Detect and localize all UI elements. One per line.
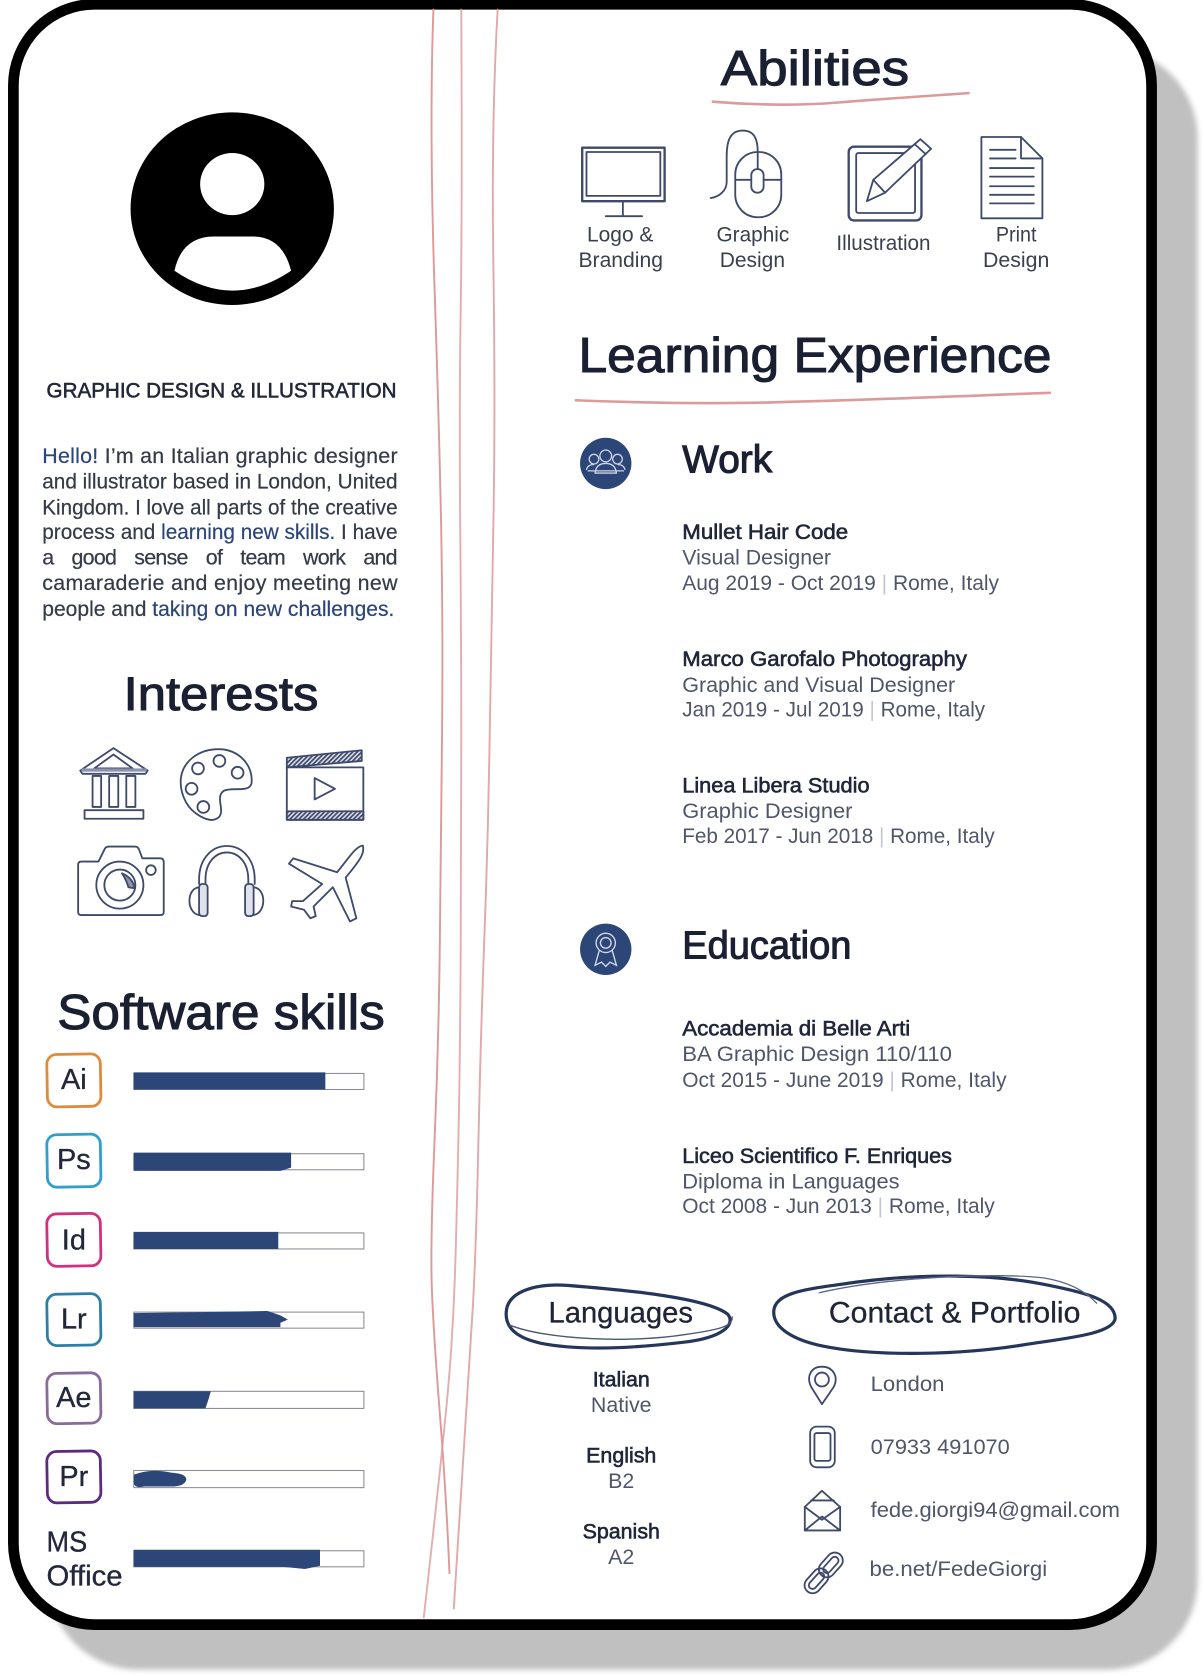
contact: portfolio link xyxy=(801,1549,1047,1597)
subtitle: GRAPHIC DESIGN & ILLUSTRATION xyxy=(47,379,397,403)
languages list: A2 xyxy=(608,1545,634,1569)
work: Linea Libera Studio: Linea Libera Studio xyxy=(682,774,870,798)
education: Accademia di Belle Arti: Oct 2015 - June 2019 | Rome, Italy xyxy=(682,1068,1007,1092)
heading: Learning Experience: Learning Experience xyxy=(578,328,1051,383)
languages list: B2 xyxy=(608,1469,634,1493)
icon: palette xyxy=(181,749,252,820)
contact: portfolio link: be.net/FedeGiorgi xyxy=(870,1557,1047,1581)
heading: Abilities xyxy=(713,41,969,105)
ability: Illustration: Illustration xyxy=(836,231,931,255)
contact: email: fede.giorgi94@gmail.com xyxy=(871,1498,1120,1522)
heading: Languages xyxy=(506,1285,732,1348)
icon: museum xyxy=(80,748,148,819)
skill: Lightroom: Lr xyxy=(61,1304,87,1336)
section: Work xyxy=(580,438,773,489)
icon: headphones xyxy=(189,846,263,916)
icon: profile avatar xyxy=(131,112,334,305)
work: Mullet Hair Code: Visual Designer xyxy=(682,546,831,570)
intro paragraph: Hello! I’m an Italian graphic designer xyxy=(42,444,398,468)
contact: location xyxy=(809,1367,944,1404)
icon: film clip xyxy=(287,750,363,820)
education: Accademia di Belle Arti xyxy=(682,1016,1007,1092)
languages list: Italian xyxy=(593,1367,650,1391)
ability: Graphic Design: Graphic xyxy=(717,222,790,246)
heading: Interests: Interests xyxy=(124,667,318,720)
icon: team badge xyxy=(580,438,631,489)
ability: Logo & Branding: Logo & xyxy=(587,222,653,246)
education: Accademia di Belle Arti: BA Graphic Design 110/110 xyxy=(682,1042,952,1066)
work: Mullet Hair Code xyxy=(682,520,999,595)
education: Liceo Scientifico F. Enriques: Oct 2008 - Jun 2013 | Rome, Italy xyxy=(682,1194,995,1218)
heading: Contact & Portfolio xyxy=(774,1276,1115,1353)
intro paragraph: process and learning new skills. I have xyxy=(42,520,398,544)
intro paragraph: a good sense of team work and xyxy=(42,546,398,570)
section: Education: Education xyxy=(682,924,851,967)
skill: Lightroom xyxy=(47,1293,364,1346)
languages list: Spanish xyxy=(583,1519,660,1543)
section: Work: Work xyxy=(682,439,773,482)
skill: Premiere xyxy=(47,1451,364,1503)
work: Marco Garofalo Photography: Jan 2019 - Jul 2019 | Rome, Italy xyxy=(682,698,985,722)
intro paragraph: camaraderie and enjoy meeting new xyxy=(42,571,398,595)
column dividers xyxy=(424,10,498,1617)
icon: smartphone xyxy=(810,1427,835,1467)
icon: map pin xyxy=(809,1367,836,1404)
skill: MS Office: MS xyxy=(47,1526,87,1558)
icon: camera xyxy=(78,847,164,915)
skill: After Effects xyxy=(47,1373,364,1424)
intro paragraph xyxy=(42,444,398,621)
icon: award badge xyxy=(580,924,631,975)
heading: Abilities: Abilities xyxy=(721,41,909,96)
ability: Print Design: Design xyxy=(983,248,1049,272)
icon: chain link xyxy=(801,1549,846,1597)
education: Liceo Scientifico F. Enriques xyxy=(682,1144,995,1218)
section: Education xyxy=(580,924,851,975)
ability: Print Design: Print xyxy=(996,222,1037,246)
education: Liceo Scientifico F. Enriques: Diploma in Languages xyxy=(682,1169,900,1193)
icon: document xyxy=(981,137,1042,218)
contact: location: London xyxy=(871,1372,944,1396)
skill: MS Office: Office xyxy=(47,1561,123,1593)
languages list xyxy=(583,1367,660,1569)
heading: Languages: Languages xyxy=(548,1296,693,1329)
languages list: English xyxy=(586,1443,656,1467)
intro paragraph: Kingdom. I love all parts of the creative xyxy=(42,495,398,519)
heading: Contact & Portfolio: Contact & Portfolio xyxy=(829,1296,1080,1329)
skill: MS Office xyxy=(47,1526,364,1593)
languages list: Native xyxy=(591,1393,652,1417)
interest icons xyxy=(78,748,363,921)
ability: Print Design xyxy=(981,137,1049,272)
skill: InDesign xyxy=(47,1213,364,1267)
work: Linea Libera Studio: Feb 2017 - Jun 2018 | Rome, Italy xyxy=(682,824,995,848)
work: Mullet Hair Code: Aug 2019 - Oct 2019 | Rome, Italy xyxy=(682,571,999,595)
intro paragraph: people and taking on new challenges. xyxy=(42,597,394,621)
work: Marco Garofalo Photography xyxy=(682,647,985,722)
work: Linea Libera Studio: Graphic Designer xyxy=(682,799,852,823)
ability: Graphic Design xyxy=(711,131,790,272)
contact: phone xyxy=(810,1427,1010,1467)
skill: Photoshop xyxy=(47,1134,364,1187)
skill: Premiere: Pr xyxy=(59,1461,89,1493)
heading: Learning Experience xyxy=(576,328,1051,403)
work: Marco Garofalo Photography: Graphic and Visual Designer xyxy=(682,673,955,697)
skill: InDesign: Id xyxy=(62,1225,86,1257)
ability: Illustration xyxy=(836,139,931,255)
skill: Illustrator: Ai xyxy=(61,1064,87,1096)
contact: phone: 07933 491070 xyxy=(871,1435,1010,1459)
contact: email xyxy=(805,1491,1120,1530)
icon: open envelope xyxy=(805,1491,840,1530)
skill: After Effects: Ae xyxy=(56,1382,92,1414)
skill: Illustrator xyxy=(47,1054,364,1107)
education: Accademia di Belle Arti: Accademia di Belle Arti xyxy=(682,1016,910,1040)
icon: monitor xyxy=(582,148,665,216)
work: Linea Libera Studio xyxy=(682,774,995,848)
work: Marco Garofalo Photography: Marco Garofalo Photography xyxy=(682,647,967,671)
icon: airplane xyxy=(289,845,363,921)
icon: mouse xyxy=(711,131,781,217)
ability: Logo & Branding xyxy=(578,148,665,272)
heading: Software skills: Software skills xyxy=(57,985,385,1040)
education: Liceo Scientifico F. Enriques: Liceo Scientifico F. Enriques xyxy=(682,1144,952,1168)
work: Mullet Hair Code: Mullet Hair Code xyxy=(682,520,848,544)
icon: tablet and pencil xyxy=(849,139,931,220)
intro paragraph: and illustrator based in London, United xyxy=(42,470,398,494)
skill: Photoshop: Ps xyxy=(57,1144,91,1176)
ability: Graphic Design: Design xyxy=(720,248,785,272)
ability: Logo & Branding: Branding xyxy=(578,248,663,272)
